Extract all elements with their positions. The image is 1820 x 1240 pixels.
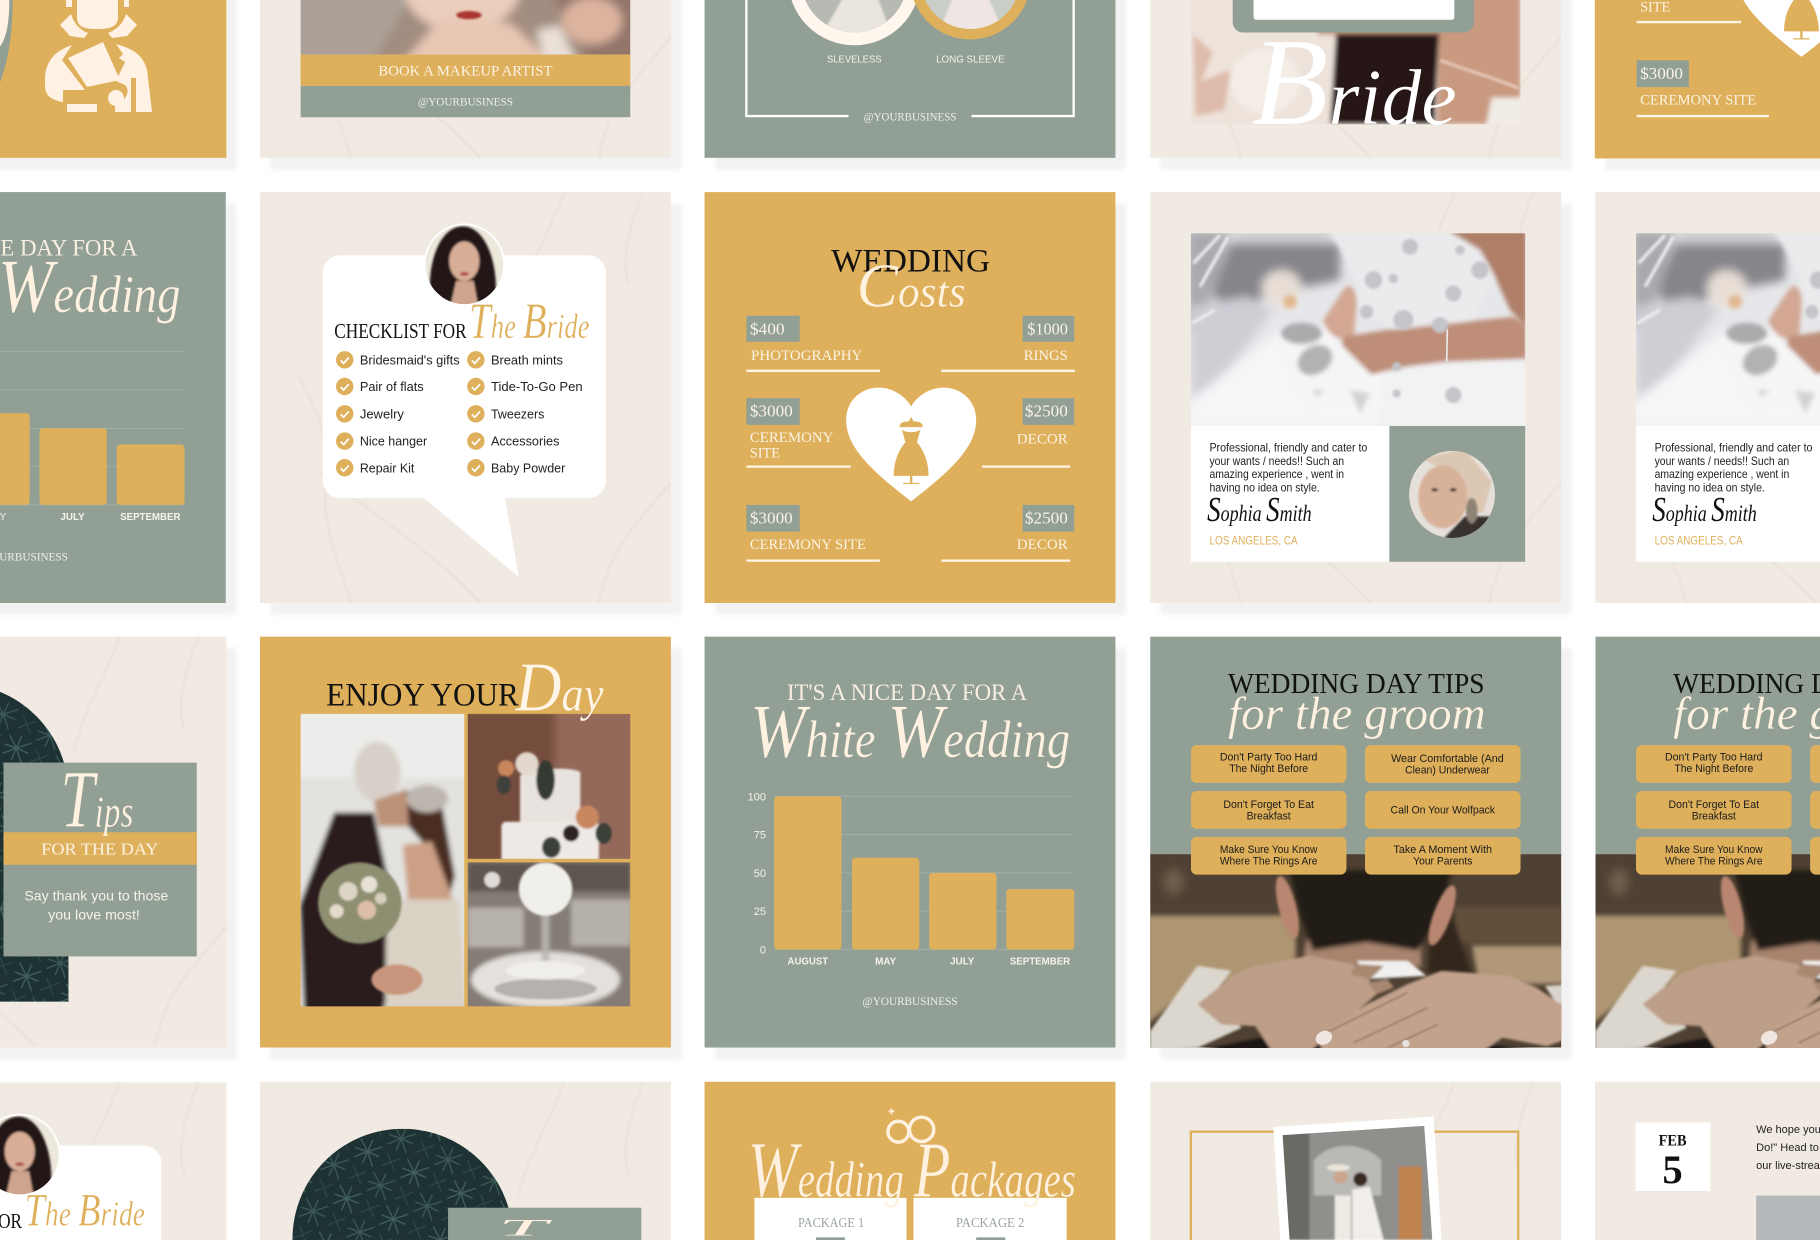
caption: CEREMONY SITE xyxy=(1640,92,1756,108)
quote text: having no idea on style. xyxy=(1209,481,1320,495)
title: IT'S A NICE DAY FOR A xyxy=(787,680,1027,706)
card: white wedding chart xyxy=(705,637,1126,1059)
frame xyxy=(746,0,1074,116)
bar chart: MAY xyxy=(875,957,897,968)
icon: rings xyxy=(888,1108,934,1142)
heart with dress xyxy=(1736,0,1820,57)
tip text: Say thank you to those xyxy=(24,888,169,904)
tip buttons xyxy=(1191,745,1521,875)
checklist: Bridesmaid's gifts xyxy=(360,352,460,367)
script: The Bride: The Bride xyxy=(469,293,590,350)
checklist: Repair Kit xyxy=(360,460,415,475)
bar chart: AUGUST xyxy=(788,957,828,968)
card: wedding costs xyxy=(705,192,1126,615)
photo: wedding cake xyxy=(468,714,630,859)
card: testimonial repeat xyxy=(1595,192,1820,603)
script: The Bride: The Bride xyxy=(24,1186,145,1237)
card: tips for the day: you love most! xyxy=(48,906,140,922)
location: LOS ANGELES, CA xyxy=(1655,534,1743,547)
bar chart: 75 xyxy=(754,830,766,842)
tip buttons: Make Sure You Know xyxy=(1220,844,1318,856)
package 1 box xyxy=(754,1198,907,1240)
foliage arch xyxy=(0,692,68,1002)
photo: couple kissing xyxy=(296,708,470,1012)
title: WEDDING DAY TIPS xyxy=(1228,668,1485,700)
card: tips for the day xyxy=(0,637,237,1059)
tip buttons: Take A Moment With xyxy=(1393,844,1492,856)
photo: smiling bride with veil xyxy=(300,0,630,54)
quote text xyxy=(1655,441,1813,495)
sage frame xyxy=(1233,0,1474,32)
gold banner xyxy=(301,55,630,86)
quote text: your wants / needs!! Such an xyxy=(1655,454,1789,468)
quote text: Professional, friendly and cater to xyxy=(1209,441,1368,455)
card: bride photo xyxy=(1150,0,1572,169)
speech bubble xyxy=(323,255,606,577)
quote text: your wants / needs!! Such an xyxy=(1209,454,1344,468)
card: checklist for the bride xyxy=(260,192,681,615)
cost rows: DECOR xyxy=(1017,537,1069,553)
card: wedding packages xyxy=(705,1082,1115,1240)
checklist: Tide-To-Go Pen xyxy=(491,379,583,394)
script: Costs: Costs xyxy=(857,250,966,320)
checklist: Breath mints xyxy=(491,352,563,367)
photo: groom neck and hands xyxy=(1592,850,1820,1051)
cost rows: $2500 xyxy=(1025,402,1068,421)
card: groom tips repeat xyxy=(1592,637,1820,1051)
script title: Wedding Packages xyxy=(748,1128,1076,1215)
bar chart: SEPTEMBER xyxy=(120,512,180,523)
avatar panel xyxy=(1389,426,1525,562)
tip buttons: Where The Rings Are xyxy=(1220,856,1317,868)
footer handle: @YOURBUSINESS xyxy=(418,96,513,109)
cost rows: $400 xyxy=(750,319,785,338)
cost rows: CEREMONY SITE xyxy=(750,537,866,553)
gold band xyxy=(3,832,197,865)
cost rows: $1000 xyxy=(1027,319,1068,338)
card: polaroid xyxy=(1150,1082,1561,1240)
white window xyxy=(1254,0,1454,20)
announcement text xyxy=(1756,1124,1820,1172)
heart with dress icon xyxy=(846,388,976,501)
tip buttons: Clean) Underwear xyxy=(1405,765,1490,777)
polaroid photo xyxy=(1273,1117,1442,1240)
checklist: Jewelry xyxy=(360,406,405,421)
card: dress sleeve comparison: LONG SLEEVE xyxy=(936,55,1005,66)
bar chart: 0 xyxy=(760,945,766,957)
card: tips partial xyxy=(260,1082,671,1240)
photo: groom neck and hands xyxy=(1147,850,1574,1051)
tip buttons: The Night Before xyxy=(1674,763,1753,775)
tip buttons: Don't Party Too Hard xyxy=(1665,751,1763,763)
cost rows: $3000 xyxy=(750,508,793,527)
bar chart xyxy=(0,352,185,523)
date month: FEB xyxy=(1659,1132,1687,1150)
long sleeve circle xyxy=(910,0,1031,39)
handle: @YOURBUSINESS xyxy=(864,111,956,124)
checklist: Accessories xyxy=(491,434,559,449)
cost rows: CEREMONY xyxy=(750,430,834,446)
card: checklist partial xyxy=(0,1082,226,1240)
foliage arch xyxy=(292,1128,508,1240)
checklist: Baby Powder xyxy=(491,460,566,475)
script: Day: Day xyxy=(514,649,604,726)
tip buttons: The Night Before xyxy=(1229,763,1308,775)
script: signature: Sophia Smith xyxy=(1207,490,1312,529)
bar chart: 100 xyxy=(748,791,766,803)
card: ceremony costs repeat xyxy=(1595,0,1820,170)
tip buttons: Where The Rings Are xyxy=(1665,856,1763,868)
sage footer xyxy=(301,86,630,117)
date tile xyxy=(1635,1122,1710,1191)
photo: reception table xyxy=(464,859,633,1010)
script title: White Wedding xyxy=(750,689,1070,774)
script: Bride: Bride xyxy=(1251,13,1457,152)
checklist: Nice hanger xyxy=(360,434,428,449)
card: wedding packages: PACKAGE 2 xyxy=(956,1216,1024,1231)
circular photo fragment xyxy=(0,0,13,82)
sage panel xyxy=(3,763,197,956)
title: ENJOY YOUR xyxy=(326,678,519,714)
cost rows: SITE xyxy=(750,445,780,461)
bar chart: 25 xyxy=(754,906,766,918)
band text: FOR THE DAY xyxy=(41,839,158,858)
price tabs xyxy=(816,1237,1005,1240)
tip buttons: Breakfast xyxy=(1692,810,1737,822)
package labels: PACKAGE 1 xyxy=(798,1216,864,1231)
script subtitle: for the groom xyxy=(1228,689,1486,740)
price xyxy=(1637,60,1689,87)
tip buttons: Call On Your Wolfpack xyxy=(1391,805,1495,817)
tip buttons: Don't Forget To Eat xyxy=(1223,799,1315,811)
card: dress sleeve comparison xyxy=(705,0,1126,169)
cost rows: RINGS xyxy=(1024,348,1068,364)
title: WEDDING xyxy=(831,244,990,280)
tip buttons: Breakfast xyxy=(1247,810,1291,822)
cost rows: DECOR xyxy=(1017,431,1069,447)
checklist: Pair of flats xyxy=(360,379,424,394)
card: save the date xyxy=(1595,1082,1820,1240)
tip buttons: Make Sure You Know xyxy=(1665,844,1763,856)
script: signature: Sophia Smith xyxy=(1652,490,1757,529)
cost rows: PHOTOGRAPHY xyxy=(751,348,863,364)
tip buttons: Don't Forget To Eat xyxy=(1669,799,1760,811)
photo: bridal shoe xyxy=(1632,230,1820,430)
bar chart: JULY xyxy=(60,512,85,523)
card: wedding day tips for the groom xyxy=(1147,637,1574,1059)
speech bubble xyxy=(0,1146,161,1240)
checklist: Tweezers xyxy=(491,406,544,421)
labels: SLEVELESS xyxy=(827,55,882,66)
quote panel xyxy=(1191,426,1389,562)
icon: bride figure xyxy=(45,0,152,112)
card: wedding chart partial xyxy=(0,192,236,615)
photo: bride arm and florals xyxy=(1184,0,1526,131)
package 2 box xyxy=(913,1198,1067,1240)
avatar xyxy=(0,1114,60,1194)
cost rows xyxy=(746,316,1075,561)
sleeveless circle xyxy=(788,0,920,45)
heading: CHECKLIST FOR xyxy=(334,319,467,343)
quote text: amazing experience , went in xyxy=(1655,467,1789,481)
tip buttons: Wear Comfortable (And xyxy=(1391,753,1504,765)
tip buttons: Don't Party Too Hard xyxy=(1220,751,1317,763)
card: book a makeup artist xyxy=(260,0,681,169)
bar chart xyxy=(748,791,1074,968)
card: testimonial xyxy=(1150,192,1572,615)
card: ceremony costs repeat: $3000 xyxy=(1640,64,1683,83)
banner text: BOOK A MAKEUP ARTIST xyxy=(378,63,553,79)
location: LOS ANGELES, CA xyxy=(1209,534,1298,547)
sage panel xyxy=(448,1208,641,1240)
card: bride icon xyxy=(0,0,237,169)
bar chart: JULY xyxy=(950,957,975,968)
quote text: amazing experience , went in xyxy=(1209,467,1344,481)
quote panel xyxy=(1636,426,1820,562)
bar chart: SEPTEMBER xyxy=(1010,957,1070,968)
photo: bridal shoe xyxy=(1187,230,1530,430)
checklist xyxy=(336,351,583,476)
avatar xyxy=(424,224,504,304)
quote text: having no idea on style. xyxy=(1655,481,1765,495)
gold frame xyxy=(1191,1132,1518,1240)
photo xyxy=(1756,1196,1820,1240)
handle: @YOURBUSINESS xyxy=(862,995,958,1008)
quote text xyxy=(1209,441,1368,495)
cost rows: $3000 xyxy=(750,402,793,421)
bar chart: 50 xyxy=(754,868,766,880)
tip buttons xyxy=(1636,745,1820,875)
cost rows: $2500 xyxy=(1025,508,1068,527)
text: site: SITE xyxy=(1640,0,1670,16)
tip buttons: Your Parents xyxy=(1413,856,1473,868)
card: enjoy your day xyxy=(260,637,681,1059)
date day: 5 xyxy=(1662,1147,1683,1192)
script: Tips: Tips xyxy=(60,754,133,844)
